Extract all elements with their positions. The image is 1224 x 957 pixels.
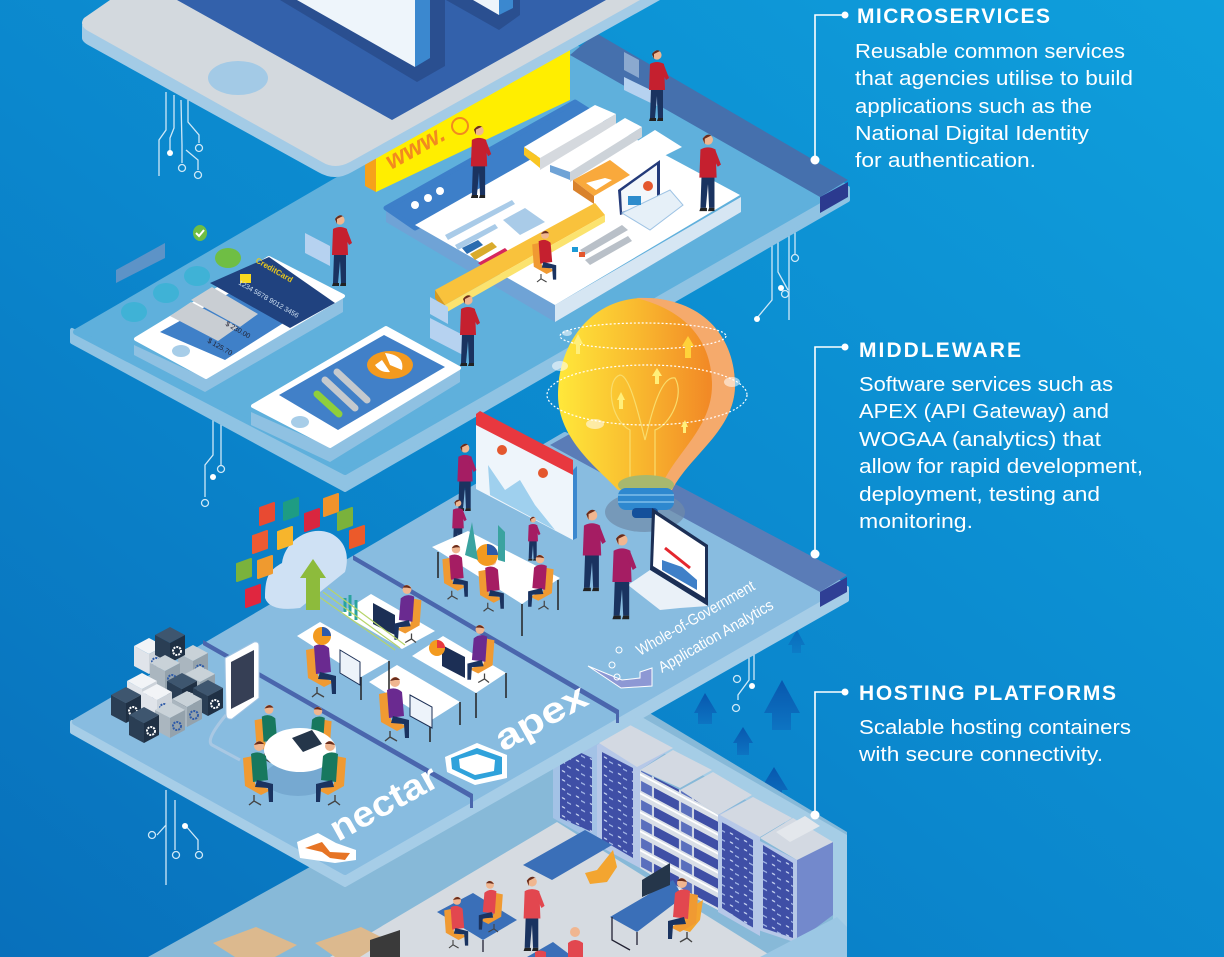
text: microservices: that agencies utilise to build bbox=[855, 67, 1133, 90]
floor bbox=[330, 822, 773, 957]
icon: upward arrows bbox=[694, 630, 805, 806]
text: hosting platforms: Scalable hosting containers bbox=[859, 716, 1131, 739]
section dividers bbox=[203, 555, 619, 808]
panel: middleware platform bbox=[72, 431, 847, 885]
text: middleware: MIDDLEWARE bbox=[859, 339, 1021, 362]
data orbit rings bbox=[547, 323, 747, 425]
text: microservices: for authentication. bbox=[855, 149, 1036, 172]
small arrows bbox=[573, 334, 694, 433]
apex logo and wordmark: apex bbox=[487, 675, 594, 759]
screen panels bbox=[280, 0, 520, 82]
standing phone bbox=[210, 642, 259, 760]
server racks bbox=[553, 715, 833, 943]
cube pile bbox=[111, 627, 223, 743]
text: middleware: WOGAA (analytics) that bbox=[859, 428, 1101, 451]
home button bbox=[208, 61, 268, 95]
meeting table team bbox=[243, 705, 346, 805]
ruler bbox=[435, 203, 605, 312]
platform base bbox=[148, 690, 847, 957]
platform thickness bbox=[72, 588, 847, 885]
payment phone bbox=[251, 328, 460, 462]
text: microservices: Reusable common services bbox=[855, 40, 1125, 63]
phone screen bbox=[177, 0, 606, 120]
panel: hosting platforms bbox=[148, 690, 847, 957]
lightbulb bbox=[547, 298, 747, 532]
phone platform bbox=[82, 0, 660, 177]
office staff bbox=[444, 877, 698, 957]
text: middleware: deployment, testing and bbox=[859, 483, 1100, 506]
platform thickness bbox=[72, 188, 848, 490]
credit card bbox=[210, 257, 335, 328]
floating app icons bbox=[237, 494, 364, 607]
credit card phone: $ 230.00 bbox=[224, 321, 251, 340]
analytics caption bbox=[588, 577, 777, 688]
text: microservices: applications such as the bbox=[855, 95, 1092, 118]
office desks bbox=[297, 585, 506, 742]
text: middleware bbox=[859, 339, 1143, 533]
blue desks bbox=[437, 830, 683, 957]
text: hosting platforms: HOSTING PLATFORMS bbox=[859, 682, 1116, 705]
connector: middleware bbox=[810, 344, 848, 558]
hosting platform corner bbox=[760, 917, 847, 957]
dark band bbox=[550, 431, 847, 592]
storage boxes bbox=[213, 927, 400, 957]
credit card phone: 1234 5678 9012 3456 bbox=[237, 280, 300, 320]
dark band bbox=[570, 33, 848, 197]
text: middleware: APEX (API Gateway) and bbox=[859, 400, 1109, 423]
tablets bbox=[305, 52, 657, 355]
text: microservices: National Digital Identity bbox=[855, 122, 1090, 145]
text: hosting platforms: with secure connectivity. bbox=[858, 743, 1103, 766]
credit card phone: CreditCard bbox=[254, 256, 294, 284]
nectar logo and wordmark: nectar bbox=[322, 756, 445, 849]
laptop bbox=[618, 160, 660, 215]
website banner: www. bbox=[380, 120, 450, 175]
website board bbox=[386, 102, 741, 322]
dashboard board bbox=[476, 411, 577, 540]
text: microservices bbox=[855, 5, 1133, 172]
connector: microservices bbox=[810, 12, 848, 164]
website banner bbox=[365, 48, 570, 192]
bulb base bbox=[618, 475, 674, 495]
text: microservices: MICROSERVICES bbox=[857, 5, 1050, 28]
panel: microservices platform bbox=[72, 33, 848, 490]
apex logo and wordmark bbox=[445, 675, 594, 785]
seated staff at lower edge bbox=[568, 940, 583, 957]
connector: hosting platforms bbox=[810, 688, 848, 820]
people bbox=[332, 50, 721, 366]
analytics caption: Whole-of-Government bbox=[634, 577, 759, 659]
analytics team bbox=[432, 444, 636, 636]
platform top bbox=[76, 45, 844, 472]
analytics laptop bbox=[628, 508, 708, 610]
text: middleware: Software services such as bbox=[859, 373, 1113, 396]
nectar logo and wordmark bbox=[297, 756, 445, 863]
text: middleware: monitoring. bbox=[859, 510, 973, 533]
credit card phone: $ 125.70 bbox=[206, 338, 233, 357]
circuit lines bbox=[148, 92, 798, 885]
analytics caption: Application Analytics bbox=[656, 597, 777, 676]
text: middleware: allow for rapid development, bbox=[859, 455, 1143, 478]
platform top bbox=[75, 435, 843, 872]
info cards bbox=[524, 105, 616, 158]
cloud upload bbox=[265, 531, 347, 610]
credit card phone bbox=[134, 256, 343, 392]
circuit end dots bbox=[167, 150, 784, 829]
orange chairs bbox=[585, 850, 703, 932]
content bars bbox=[445, 200, 515, 250]
app icons bbox=[116, 225, 241, 322]
text: hosting platforms bbox=[858, 682, 1131, 766]
